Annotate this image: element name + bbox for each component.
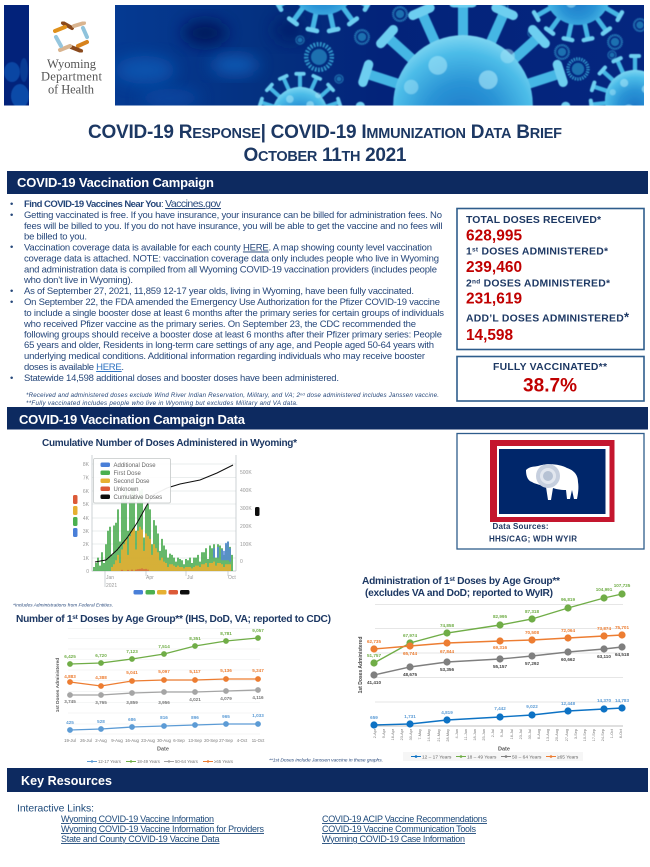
axis titles [55,658,169,752]
x axis labels: 2-Apr [373,728,377,738]
series: 18-49 years: 9,057 [252,628,264,633]
series: 12-17 years: 659 [370,715,378,720]
legend box: Additional Dose [114,463,156,469]
x axis labels: 1-Oct [610,728,614,738]
x axis labels: 19-Jul [64,738,76,743]
title: OCTOBER 11TH 2021 [244,145,407,166]
text block: campaign bullets: Vaccination coverage data is available for each county HERE. A map showing county level vaccination [24,242,432,254]
series: 12-17 years: 12,448 [561,701,575,706]
footnotes: dose data: dose administered includes Janssen vaccine. [305,392,439,399]
series: 50-64 years: 4,079 [220,696,232,701]
section header: COVID-19 Vaccination Campaign: COVID-19 Vaccination Campaign [17,175,214,190]
right legend chip [255,507,260,516]
text block: campaign bullets: • [10,297,13,308]
2nd doses administered: 231,619 [466,290,522,308]
legend: 50 – 64 Years [512,754,542,760]
series: 12-17 years: 965 [222,714,230,719]
bottom legend chips [134,590,190,594]
text block: campaign bullets: following groups should receive a booster dose at least 6 months after their Pfizer primary series: People [24,330,442,340]
series: 12-17 years: 528 [97,719,105,724]
legend: 12-17 Years [98,759,121,764]
series: 50-64 years: 41,410 [367,680,381,685]
series: 50-64 years: 3,765 [95,700,107,705]
logo: Wyoming Department of Health: Wyoming [47,57,97,71]
chart title: st [449,576,456,583]
series: 18-49 years: 107,735 [614,583,631,588]
panel: dose totals [457,208,644,350]
section header: Key Resources: Key Resources [21,774,112,788]
series: 65+ years: 5,117 [189,669,201,674]
series: 18-49 years: 7,123 [126,649,138,654]
series: 18-49 years: 67,974 [403,633,417,638]
total doses received [466,215,602,244]
series: 50-64 years: 3,956 [158,700,170,705]
x axis labels: 26-Jul [80,738,92,743]
series: 50-64 years [367,643,629,685]
x axis labels: 23-Apr [400,728,404,740]
x axis labels: 9-Apr [382,728,386,738]
series: 65+ years: 65,744 [403,651,417,656]
legend box: Second Dose [114,479,150,485]
x axis labels: 11-Jun [464,729,468,740]
series: 65+ years: 5,247 [252,668,264,673]
series: 18-49 years [367,583,631,667]
time axis labels: Apr [146,575,154,581]
series: 18-49 years: 6,425 [64,654,76,659]
time axis labels: Jul [187,575,193,581]
x axis labels: 23-Aug [141,738,156,743]
series: 50-64 years: 63,110 [597,654,611,659]
left axis labels: 7K [83,476,90,482]
x axis labels: 16-Apr [391,728,395,740]
legend: 12 – 17 Years [422,754,452,760]
axis titles [358,637,510,752]
series: 12-17 years: 686 [128,717,136,722]
text block: campaign bullets [10,198,444,384]
2nd doses administered: nd [472,278,480,286]
x axis labels: 11-Oct [252,738,265,743]
left axis labels: 3K [83,529,90,535]
x axis labels: 7-May [418,729,422,740]
2nd doses administered [466,278,611,308]
x axis labels: 30-Aug [157,738,172,743]
series: 12-17 years: 1,033 [252,713,264,718]
chart: cumulative doses administered [42,438,297,594]
footnotes: dose data: *Received and administered doses exclude Wind River Indian Reservation, Military, and VA; 2 [26,392,300,399]
series: 50-64 years: 55,157 [493,664,507,669]
series: 18-49 years: 96,819 [561,597,575,602]
legend: 18-49 Years [137,759,160,764]
series: 50-64 years: 48,675 [403,672,417,677]
right axis labels: 0 [240,559,243,565]
chart title: Doses by Age Group** [455,576,560,587]
left axis labels [83,462,90,575]
section header: COVID-19 Vaccination Campaign Data: COVID-19 Vaccination Campaign Data [19,412,246,427]
data sources text: Data Sources: [492,522,548,531]
series: 18-49 years [64,628,264,667]
series: 65+ years: 5,136 [220,668,232,673]
x axis labels: 13-Sep [188,738,203,743]
left axis labels: 1K [83,556,90,562]
x axis labels: 6-Aug [537,729,541,739]
series: 50-64 years: 3,859 [126,700,138,705]
series: 12-17 years: 7,442 [494,706,506,711]
time axis labels [106,575,236,589]
chart title: Cumulative Number of Doses Administered in Wyoming* [42,438,297,449]
x axis labels: 21-May [437,729,441,742]
links column 1: State and County COVID-19 Vaccine Data [61,834,220,844]
links column 1: Wyoming COVID-19 Vaccine Information [61,814,214,824]
text block: campaign bullets: Find COVID-19 Vaccines Near You: Vaccines.gov [24,198,222,210]
series: 12-17 years: 896 [191,715,199,720]
time axis labels: Oct [228,575,236,581]
x axis labels: 24-Sep [601,729,605,741]
x axis labels [373,728,623,742]
2nd doses administered: 2 [466,278,472,290]
series: 12-17 years [370,698,629,729]
legend [403,752,583,761]
text block: campaign bullets: • [10,242,13,253]
series: 12-17 years: 4,819 [441,710,453,715]
data sources text: HHS/CAG; WDH WYIR [489,534,577,544]
footnote: janssen doses: **1st Doses include Janssen vaccine in these graphs. [269,758,383,764]
text block: campaign bullets: • [10,199,13,210]
series: 18-49 years: 74,858 [440,623,454,628]
series: 18-49 years: 87,318 [525,609,539,614]
text block: campaign bullets: coverage data is attached. NOTE: vaccination coverage data only includes people who live in Wyoming [24,254,439,264]
text block: campaign bullets: 65 years and older, Residents in long-term care settings of any age, and People aged 50-64 years with [24,340,434,351]
series: 65+ years: 69,316 [493,645,507,650]
series: 18-49 years: 51,757 [367,653,381,658]
time axis labels: 2021 [106,583,117,589]
text block: campaign bullets: On September 22, the FDA amended the Emergency Use Authorization for the Pfizer COVID-19 vaccine [24,297,440,308]
series: 65+ years: 4,883 [64,674,76,679]
x axis labels: 2-Jul [491,729,495,737]
left axis labels: 8K [83,462,90,468]
section header: Key Resources [7,768,648,792]
cumulative line [95,465,233,562]
x axis labels: 9-Jul [500,729,504,737]
series: 65+ years: 4,388 [95,675,107,680]
series: 65+ years: 62,735 [367,639,381,644]
x axis labels: 3-Sep [574,729,578,739]
text block: campaign bullets: • [10,286,13,297]
text block: interactive links [17,804,488,844]
series: 65+ years: 73,874 [597,626,611,631]
series: 12-17 years [66,713,264,733]
chart title: (excludes VA and DoD; reported to WyIR) [365,588,553,599]
text block: campaign bullets: fees will be billed to you. If you do not have insurance, you will be able to get the vaccine and no fees will [24,221,443,232]
x axis labels [64,738,265,743]
total doses received: TOTAL DOSES RECEIVED* [466,215,602,226]
legend box [94,458,170,503]
text block: campaign bullets: and administration data is compiled from all Wyoming COVID-19 vaccination providers (includes people [24,264,437,276]
links column 1: Wyoming COVID-19 Vaccine Information for Providers [61,824,264,834]
x axis labels: 6-Sep [173,738,185,743]
series: 65+ years: 72,064 [561,628,575,633]
series: 65+ years: 70,508 [525,630,539,635]
x axis labels: 20-Sep [204,738,219,743]
x axis labels: 28-May [446,729,450,742]
x axis labels: 30-Jul [528,729,532,739]
links column 2: COVID-19 Vaccine Communication Tools [322,824,476,834]
1st doses administered [466,246,609,276]
series: 50-64 years: 3,745 [64,699,76,704]
links column 2 [322,814,488,844]
x axis labels: 17-Sep [592,729,596,741]
x axis labels: 2-Aug [95,738,107,743]
x axis labels: 16-Aug [125,738,140,743]
series: 12-17 years: 816 [160,715,168,720]
x axis labels: 10-Sep [583,729,587,741]
legend: 50-64 Years [175,759,198,764]
text block: campaign bullets: be billed to you. [24,232,87,242]
text block: campaign bullets: • [10,373,13,384]
links column 1 [61,814,264,844]
axis titles: 1st Doses Administered [55,658,61,712]
left axis labels: 6K [83,489,90,495]
series: 12-17 years: 14,783 [615,698,629,703]
left banner strip [4,5,29,108]
series: 50-64 years: 57,292 [525,661,539,666]
chart title: st [72,614,79,621]
panel: fully vaccinated: FULLY VACCINATED** [493,362,608,373]
chart title: Number of 1 [16,614,73,625]
series: 65+ years: 67,844 [440,649,454,654]
x axis labels: 8-Oct [619,728,623,738]
right axis labels: 100K [240,542,252,548]
x axis labels: 20-Aug [555,729,559,741]
series: 65+ years [64,668,264,689]
logo: Wyoming Department of Health [41,23,103,96]
series: 50-64 years: 4,116 [252,695,264,700]
right axis labels [240,470,252,565]
panel: fully vaccinated: 38.7% [523,376,577,396]
panel: wyoming flag and data sources [457,434,644,549]
right axis labels: 300K [240,506,252,512]
right axis labels: 500K [240,470,252,476]
x axis labels: 4-Jun [455,729,459,738]
text block: campaign bullets: to include a single booster dose at least 6 months after the primary series for certain groups of individuals [24,308,444,319]
x axis labels: 27-Sep [219,738,234,743]
series: 50-64 years: 60,662 [561,657,575,662]
time axis labels: Jan [106,575,114,581]
section header: COVID-19 Vaccination Campaign Data [7,407,648,430]
axis titles: Date [498,746,510,752]
x axis labels: 25-Jun [482,729,486,741]
total doses received: 628,995 [466,228,522,244]
additional doses administered [466,310,630,344]
left axis labels: 5K [83,502,90,508]
right axis labels: 400K [240,488,252,494]
text block: campaign bullets: • [10,210,13,221]
additional doses administered: ADD’L DOSES ADMINISTERED* [466,310,630,324]
legend box: Cumulative Doses [114,495,162,501]
right axis labels: 200K [240,524,252,530]
x axis labels: 23-Jul [519,729,523,739]
series: 18-49 years: 8,781 [220,631,232,636]
series: 65+ years [367,625,629,656]
text block: campaign bullets: Statewide 14,598 additional doses and booster doses have been administered. [24,373,339,384]
links column 2: COVID-19 ACIP Vaccine Recommendations [322,814,488,824]
text block: campaign bullets: underlying medical conditions. Additional information regarding individuals who may receive booster [24,351,425,362]
stacked daily bars [94,488,232,571]
additional doses administered: 14,598 [466,327,513,344]
axis titles: Date [157,746,169,752]
chart: number of 1st doses by age group [16,614,331,764]
text block: campaign bullets: As of September 27, 2021, 11,859 12-17 year olds, living in Wyoming, have been fully vaccinated. [24,286,414,297]
legend: ≥65 Years [557,754,579,760]
text block: campaign bullets: Getting vaccinated is free. If you have insurance, your insurance can be billed for administration fees. No [24,210,442,221]
x axis labels: 13-Aug [546,729,550,741]
data sources text [489,522,577,544]
series: 18-49 years: 6,720 [95,653,107,658]
x axis labels: 4-Oct [237,738,248,743]
left legend chips [73,495,78,537]
virus banner image [115,5,644,106]
series: 65+ years: 5,041 [126,670,138,675]
logo: Wyoming Department of Health: Department [41,70,103,84]
axis titles: 1st Doses Administered [358,637,364,693]
text block: campaign bullets: who don’t live in Wyoming). [23,275,133,286]
1st doses administered: 239,460 [466,259,522,276]
title [88,122,562,166]
legend [87,759,233,764]
series: 18-49 years: 7,514 [158,644,170,649]
left axis labels: 0 [86,569,89,575]
logo: Wyoming Department of Health: of Health [48,82,95,96]
links column 2: Wyoming COVID-19 Case Information [322,834,465,844]
chart: administration of 1st doses by age group [358,576,631,761]
footnotes: dose data [26,392,439,407]
x axis labels: 30-Apr [409,728,413,740]
x axis labels: 27-Aug [565,729,569,741]
footnotes: dose data: **Fully vaccinated includes people who live in Wyoming but excludes Military and VA data. [26,400,298,407]
header banner [4,5,644,106]
legend: ≥65 Years [214,759,233,764]
series: 65+ years: 5,097 [158,669,170,674]
1st doses administered: DOSES ADMINISTERED* [478,246,609,258]
section header: COVID-19 Vaccination Campaign [7,171,648,194]
series: 12-17 years: 1,731 [404,714,416,719]
legend box: Unknown [114,487,139,493]
series: 18-49 years: 104,991 [596,587,613,592]
text block: campaign bullets: doses is available HERE. [24,362,124,373]
series: 50-64 years [64,687,264,705]
left axis labels: 4K [83,516,90,522]
chart title [362,576,560,599]
footnotes: dose data: nd [300,392,306,396]
text block: campaign bullets: who received Pfizer vaccine as the primary series. On September 23, the CDC recommended the [23,319,416,330]
panel: fully vaccinated [457,356,644,401]
series: 12-17 years: 425 [66,720,74,725]
legend box: First Dose [114,471,142,477]
legend: 18 – 49 Years [467,754,497,760]
left axis labels: 2K [83,542,90,548]
x axis labels: 18-Jun [473,729,477,741]
series: 50-64 years: 64,518 [615,652,629,657]
1st doses administered: 1 [466,246,472,258]
chart title: Doses by Age Group** (IHS, DoD, VA; reported to CDC) [78,614,331,625]
title: COVID-19 RESPONSE| COVID-19 IMMUNIZATION DATA BRIEF [88,122,562,143]
footnote: federal entities: *Includes Administrations from Federal Entities. [13,602,113,608]
text block: interactive links: Interactive Links: [17,804,94,814]
series: 50-64 years: 53,356 [440,667,454,672]
series: 12-17 years: 14,370 [597,698,611,703]
series: 65+ years: 75,701 [615,625,629,630]
1st doses administered: st [472,246,479,254]
chart title: Administration of 1 [362,576,450,587]
icon: wyoming flag [490,440,614,522]
series: 18-49 years: 82,995 [493,614,507,619]
series: 12-17 years: 9,022 [526,704,538,709]
series: 50-64 years: 4,021 [189,697,201,702]
x axis labels: 9-Aug [111,738,123,743]
2nd doses administered: DOSES ADMINISTERED* [480,278,611,290]
series: 18-49 years: 8,351 [189,636,201,641]
x axis labels: 14-May [427,729,431,742]
x axis labels: 16-Jul [510,729,514,739]
